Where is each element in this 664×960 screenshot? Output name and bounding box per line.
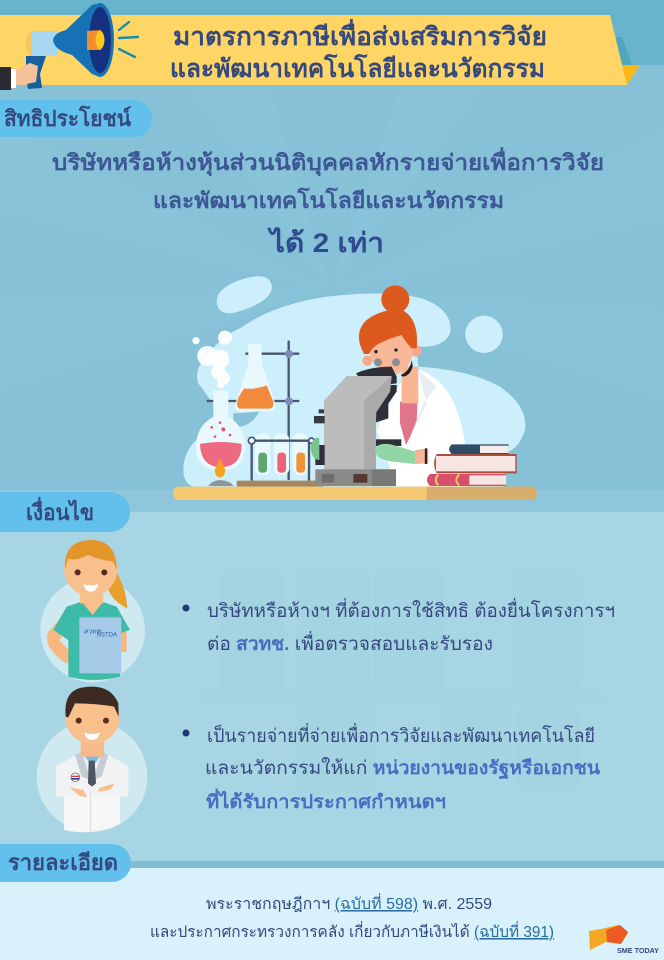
condition 2: เป็นรายจ่ายที่จ่ายเพื่อการวิจัยและพัฒนาเทคโนโลยี [207, 723, 595, 746]
condition 1: ต่อ สวทช. เพื่อตรวจสอบและรับรอง [207, 631, 493, 654]
title text: และพัฒนาเทคโนโลยีและนวัตกรรม [170, 53, 545, 83]
illustration: woman with NSTDA document [40, 540, 145, 682]
section tag: benefits: สิทธิประโยชน์ [4, 105, 131, 131]
microscope [376, 385, 397, 422]
legal references: พระราชกฤษฎีกาฯ (ฉบับที่ 598) พ.ศ. 2559 [206, 893, 492, 913]
condition 2: ที่ได้รับการประกาศกำหนดฯ [206, 788, 446, 812]
illustration: woman with NSTDA document: สวทช [83, 628, 102, 635]
benefit statement: และพัฒนาเทคโนโลยีและนวัตกรรม [153, 187, 504, 213]
section tag: conditions [0, 492, 130, 532]
logo: SME Today: SME TODAY [617, 948, 659, 955]
benefit statement [52, 146, 604, 258]
legal references [150, 893, 554, 941]
benefit statement: ได้ 2 เท่า [267, 227, 384, 258]
legal references: และประกาศกระทรวงการคลัง เกี่ยวกับภาษีเงินได้ (ฉบับที่ 391) [150, 921, 554, 941]
steam [192, 331, 232, 388]
condition 1: บริษัทหรือห้างฯ ที่ต้องการใช้สิทธิ ต้องยื่นโครงการฯ [207, 598, 615, 621]
section tag: details [0, 844, 131, 882]
test tubes [237, 433, 323, 487]
condition 1 [182, 598, 615, 654]
background: details panel [0, 861, 664, 960]
bullet [182, 604, 190, 612]
background: conditions panel [0, 512, 664, 862]
illustration: woman with NSTDA document: NSTDA [97, 633, 117, 639]
logo: SME Today [589, 925, 659, 955]
title text: มาตรการภาษีเพื่อส่งเสริมการวิจัย [173, 19, 547, 51]
conical flask [235, 344, 276, 411]
stand [207, 341, 299, 480]
section tag: conditions: เงื่อนไข [26, 496, 94, 525]
books [427, 444, 517, 486]
watermark: faint lab glassware [200, 570, 605, 794]
round flask and burner [196, 391, 245, 471]
condition 2 [182, 723, 600, 812]
benefit statement: บริษัทหรือห้างหุ้นส่วนนิติบุคคลหักรายจ่ายเพื่อการวิจัย [52, 146, 604, 177]
hands in gloves [375, 444, 415, 464]
section tag: benefits [0, 100, 152, 137]
table [173, 487, 537, 500]
condition 2: และนวัตกรรมให้แก่ หน่วยงานของรัฐหรือเอกชน [205, 757, 600, 780]
title banner [0, 15, 640, 85]
section tag: details: รายละเอียด [8, 850, 118, 875]
head and hair [362, 356, 372, 366]
background: upper panel [0, 0, 664, 512]
bullet [182, 730, 190, 736]
illustration: male scientist [37, 687, 147, 833]
icon: megaphone held in hand [0, 3, 138, 90]
title text [170, 19, 547, 83]
illustration: scientist at microscope in lab [173, 276, 537, 500]
coat [377, 370, 467, 487]
background blobs [183, 276, 525, 487]
